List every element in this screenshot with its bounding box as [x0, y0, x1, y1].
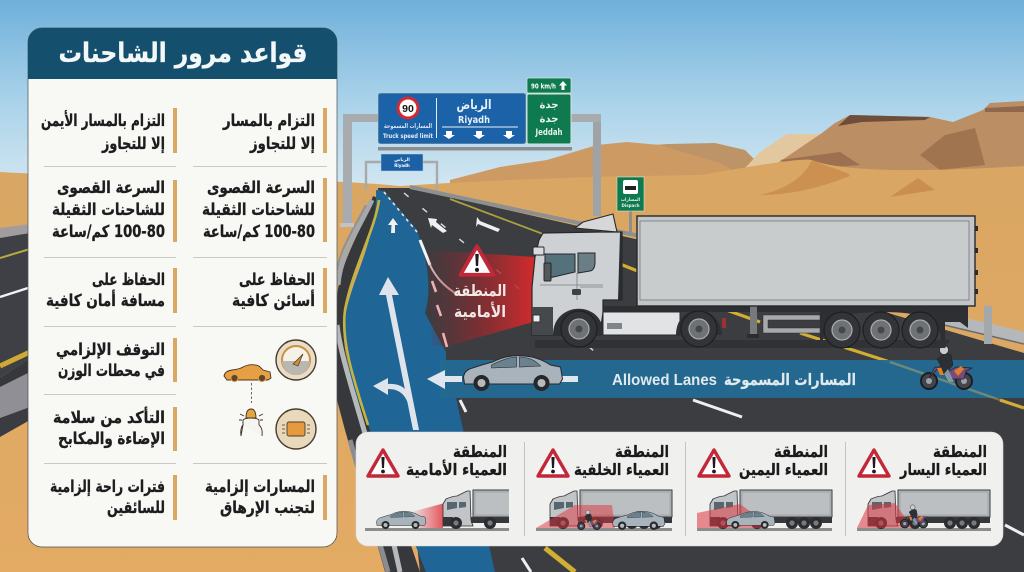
road arrows: [388, 217, 500, 233]
zone label: الأمامية: [454, 302, 506, 321]
icon: orange car: [224, 365, 271, 382]
small distant gantry: Riyadh: [394, 163, 410, 168]
rule: keep right lane: التزام بالمسار الأيمن: [41, 110, 165, 131]
background: desert mountains: [450, 101, 1024, 185]
panel: truck rules: [28, 28, 337, 547]
rule: max speed: [202, 178, 315, 241]
blind zone: left: العمياء اليسار: [899, 460, 987, 479]
roadside green sign: المسارات: [621, 197, 640, 203]
rule: keep right lane: إلا للتجاوز: [101, 134, 165, 154]
overhead gantry posts: [340, 114, 601, 227]
rule: max speed 2: للشاحنات الثقيلة: [52, 200, 165, 219]
rule: max speed 2: السرعة القصوى: [57, 178, 165, 198]
rule: lights and brakes: الإضاءة والمكابح: [58, 429, 165, 449]
rule: tyres: الحفاظ على: [239, 270, 315, 289]
connector dashed line: [250, 383, 252, 403]
rule: tyres: [232, 270, 315, 311]
dividers: [524, 442, 846, 536]
blind zone: right: [697, 442, 832, 531]
arrow: band left: [427, 370, 578, 389]
green sign: Jeddah: [535, 128, 562, 138]
road markings: [384, 192, 1024, 572]
speed limit disc: 90: [402, 103, 414, 115]
small distant gantry: الرياض: [394, 158, 410, 163]
arrows on blue lane: [373, 277, 419, 430]
rule: mandatory lanes: لتجنب الإرهاق: [220, 498, 315, 517]
trailer underframe: [555, 306, 968, 340]
main road asphalt: [378, 188, 1024, 572]
blue overhead sign: Truck speed limit: [383, 133, 433, 140]
rule: lights and brakes: [53, 407, 165, 449]
panel: blind zones: [356, 432, 1003, 546]
rule: max speed 2: 100-80 كم/ساعة: [52, 222, 165, 241]
blind zone: left: المنطقة: [933, 442, 987, 461]
trailer box: [637, 216, 978, 306]
blind zone: left: [857, 442, 991, 531]
background: sand: [0, 160, 1024, 572]
blue overhead sign: الرياض: [456, 98, 492, 113]
green speed sign: 90 km/h: [531, 82, 556, 90]
green sign: جدة: [540, 113, 558, 125]
blue allowed lane: [344, 190, 495, 572]
accent bars: [173, 108, 327, 520]
rule: mandatory lanes: المسارات إلزامية: [205, 477, 315, 497]
rule: safe distance: الحفاظ على: [92, 270, 165, 289]
motorcycle: [921, 345, 972, 389]
blind zone: rear: العمياء الخلفية: [574, 460, 669, 479]
rule: stay in lane: [222, 111, 315, 154]
blind zone: front: [365, 444, 509, 531]
truck: [532, 214, 978, 348]
green sign: [527, 94, 571, 144]
icon: beacon: [239, 409, 263, 436]
blue overhead sign: Riyadh: [458, 115, 490, 126]
rule: rest periods: فترات راحة إلزامية: [50, 477, 165, 497]
blue overhead sign: [378, 94, 526, 144]
rule: keep right lane: [41, 110, 165, 154]
blind zone: front: المنطقة: [453, 442, 507, 461]
rule: max speed 2: [52, 178, 165, 241]
heading: [28, 28, 337, 79]
rule: stay in lane: التزام بالمسار: [222, 111, 315, 131]
blind zone: right: المنطقة: [774, 442, 828, 461]
rule: stay in lane: إلا للتجاوز: [249, 134, 315, 154]
blind zone: right: العمياء اليمين: [739, 460, 828, 479]
band label arabic: المسارات المسموحة: [724, 370, 856, 389]
blind zone: rear: [536, 442, 672, 531]
blue overhead sign: المسارات المسموحة: [384, 122, 432, 130]
lane yellow edge: [344, 200, 379, 425]
dividers: [44, 166, 327, 464]
cab: [532, 214, 722, 335]
roadside green sign: [617, 177, 644, 236]
wheels: [561, 311, 938, 348]
left road strip: [0, 224, 30, 437]
rule: max speed: السرعة القصوى: [207, 178, 315, 198]
blind zone: front: العمياء الأمامية: [406, 460, 507, 479]
rule: max speed: للشاحنات الثقيلة: [202, 200, 315, 219]
shadow: [535, 340, 950, 348]
right guardrail: [410, 187, 1024, 344]
rule: mandatory lanes: [205, 477, 315, 517]
front blind zone: [428, 246, 535, 347]
left guardrail and shoulder: [337, 196, 420, 572]
rule: lights and brakes: التأكد من سلامة: [53, 407, 165, 428]
rule: max speed: 100-80 كم/ساعة: [203, 222, 315, 241]
rule: weigh stations: [56, 340, 165, 381]
icon: brake pad: [276, 409, 316, 449]
roadside green sign: Dispach: [622, 203, 640, 209]
band label english: Allowed Lanes: [612, 372, 717, 389]
green speed sign: [527, 78, 571, 93]
blue band: allowed lanes: [440, 360, 1024, 398]
rule: weigh stations: في محطات الوزن: [58, 361, 165, 381]
small distant gantry: [366, 154, 437, 190]
green sign: جدة: [540, 99, 558, 111]
blind zone: rear: المنطقة: [615, 442, 669, 461]
zone label: المنطقة: [454, 281, 506, 300]
zone label: [454, 281, 506, 321]
icon: speedometer: [276, 340, 316, 380]
rule: rest periods: [50, 477, 165, 518]
rule: safe distance: مسافة أمان كافية: [46, 290, 165, 310]
heading: قواعد مرور الشاحنات: [58, 38, 308, 69]
rule: safe distance: [46, 270, 165, 310]
rule: weigh stations: التوقف الإلزامي: [56, 340, 165, 360]
car on band: [464, 356, 562, 391]
background: sky: [0, 0, 1024, 200]
rule: tyres: أسائن كافية: [232, 290, 315, 311]
speed limit disc: [398, 98, 418, 118]
faint yellow line crossing band: [890, 362, 1000, 400]
rule: rest periods: للسائقين: [107, 498, 165, 518]
icon: warning triangle: [460, 246, 494, 275]
